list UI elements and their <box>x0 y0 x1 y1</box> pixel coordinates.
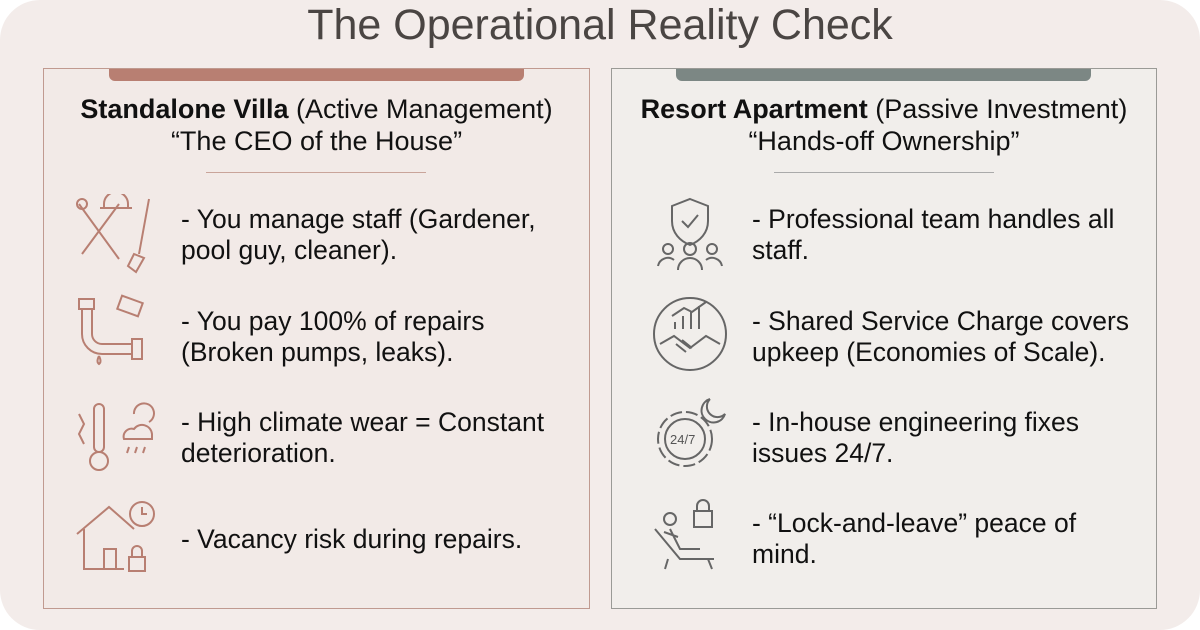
item 3: issues 24/7. <box>752 438 893 468</box>
item 3: deterioration. <box>181 438 336 468</box>
icon: climate <box>78 402 155 471</box>
accent bar <box>676 69 1091 81</box>
icon: tools <box>76 194 150 274</box>
icon: pipe and money <box>78 294 144 366</box>
panel bottom dashes left <box>43 588 590 609</box>
icon: handshake chart <box>653 297 727 371</box>
heading <box>80 94 553 156</box>
panel: standalone villa <box>43 68 590 609</box>
panel bottom right <box>611 588 1157 609</box>
item 1: pool guy, cleaner). <box>181 235 397 265</box>
item 4: mind. <box>752 539 817 569</box>
item 1: - You manage staff (Gardener, <box>181 204 536 234</box>
heading: “The CEO of the House” <box>171 126 462 156</box>
icon: shield team <box>657 198 723 270</box>
item 2: - Shared Service Charge covers <box>752 306 1129 336</box>
item 1: staff. <box>752 235 809 265</box>
panel: resort apartment <box>611 68 1157 609</box>
item 2: upkeep (Economies of Scale). <box>752 337 1106 367</box>
heading: Resort Apartment (Passive Investment) <box>641 94 1127 124</box>
item 3: - In-house engineering fixes <box>752 407 1079 437</box>
item 2: (Broken pumps, leaks). <box>181 337 453 367</box>
item 3: - High climate wear = Constant <box>181 407 544 437</box>
item 4: - “Lock-and-leave” peace of <box>752 508 1076 538</box>
icon: 24/7 gear <box>657 398 726 467</box>
heading <box>641 94 1127 156</box>
item 2 <box>181 306 484 367</box>
item 2 <box>752 306 1129 367</box>
heading: Standalone Villa (Active Management) <box>80 94 553 124</box>
icon: 24/7 gear: 24/7 <box>670 432 695 447</box>
heading: “Hands-off Ownership” <box>748 126 1020 156</box>
item 4: - Vacancy risk during repairs. <box>181 524 522 554</box>
item 3 <box>181 407 544 468</box>
item 4 <box>752 508 1076 569</box>
accent bar <box>109 69 524 81</box>
title: The Operational Reality Check <box>307 1 893 49</box>
item 1 <box>181 204 536 265</box>
icon: house with clock and lock <box>76 501 155 572</box>
icon: lounger with lock <box>654 499 714 570</box>
item 1: - Professional team handles all <box>752 204 1114 234</box>
item 2: - You pay 100% of repairs <box>181 306 484 336</box>
item 3 <box>752 407 1079 468</box>
item 1 <box>752 204 1114 265</box>
